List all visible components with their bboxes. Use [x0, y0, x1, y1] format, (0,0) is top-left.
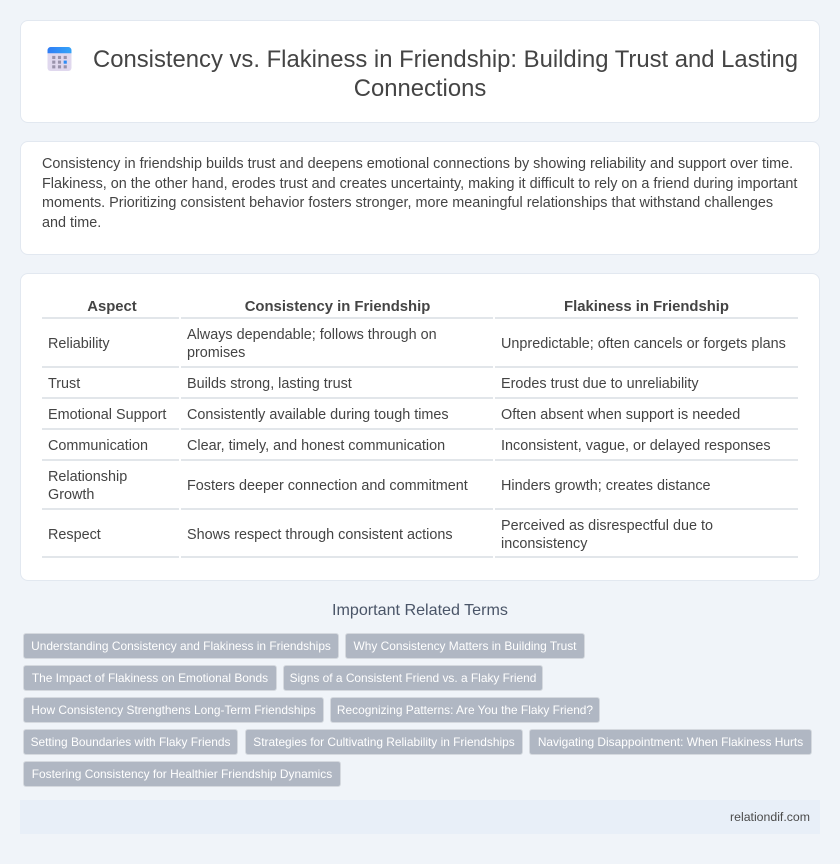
row: Communication: Inconsistent, vague, or delayed responses	[501, 438, 771, 454]
panel: introduction	[20, 141, 820, 255]
row: Trust	[48, 376, 699, 392]
footer source: relationdif.com	[730, 810, 810, 824]
footer	[20, 800, 820, 834]
tag	[245, 729, 523, 755]
table header: Aspect	[87, 299, 137, 315]
tag: Fostering Consistency for Healthier Friendship Dynamics	[32, 767, 332, 781]
tag: Signs of a Consistent Friend vs. a Flaky Friend	[290, 671, 536, 685]
table header: Flakiness in Friendship	[564, 299, 729, 315]
panel: title header	[20, 20, 820, 123]
intro text: Flakiness, on the other hand, erodes trust and creates uncertainty, making it difficult to rely on a friend during important	[42, 176, 797, 192]
tag	[23, 697, 324, 723]
intro text	[42, 156, 798, 230]
tag: Recognizing Patterns: Are You the Flaky Friend?	[337, 703, 593, 717]
panel: comparison table	[20, 273, 820, 581]
tag: Why Consistency Matters in Building Trust	[354, 639, 576, 653]
row: Relationship Growth: Fosters deeper connection and commitment	[187, 478, 468, 494]
row: Reliability: promises	[187, 345, 245, 361]
tag: How Consistency Strengthens Long-Term Friendships	[31, 703, 316, 717]
row: Emotional Support	[48, 407, 740, 423]
row: Reliability	[48, 327, 786, 361]
tag	[23, 665, 277, 691]
row: Reliability: Always dependable; follows through on	[187, 327, 437, 343]
tag	[283, 665, 543, 691]
comparison table	[42, 299, 798, 558]
row: Respect: inconsistency	[501, 536, 587, 552]
intro text: Consistency in friendship builds trust and deepens emotional connections by showing reliability and support over time.	[42, 156, 793, 172]
table header	[87, 299, 729, 315]
row: Trust: Builds strong, lasting trust	[187, 376, 352, 392]
heading: related terms: Important Related Terms	[332, 601, 508, 619]
row: Trust: Trust	[48, 376, 80, 392]
row: Reliability: Unpredictable; often cancels or forgets plans	[501, 336, 786, 352]
title: Consistency vs. Flakiness in Friendship: Building Trust and Lasting	[93, 46, 798, 72]
row: Relationship Growth: Growth	[48, 487, 94, 503]
intro text: and time.	[42, 214, 101, 230]
row: Communication: Communication	[48, 438, 148, 454]
tag: Navigating Disappointment: When Flakiness Hurts	[538, 735, 803, 749]
intro text: moments. Prioritizing consistent behavior fosters stronger, more meaningful relationships that withstand challenges	[42, 195, 773, 211]
row: Respect	[48, 518, 713, 552]
tag	[345, 633, 585, 659]
row: Communication	[48, 438, 771, 454]
row: Respect: Shows respect through consistent actions	[187, 527, 453, 543]
row: Emotional Support: Consistently available during tough times	[187, 407, 449, 423]
row: Relationship Growth: Hinders growth; creates distance	[501, 478, 711, 494]
row: Relationship Growth: Relationship	[48, 469, 127, 485]
tag: The Impact of Flakiness on Emotional Bonds	[32, 671, 268, 685]
tag	[23, 761, 341, 787]
title: Connections	[354, 75, 486, 102]
row: Reliability: Reliability	[48, 336, 110, 352]
tag: Strategies for Cultivating Reliability in Friendships	[253, 735, 515, 749]
row: Emotional Support: Often absent when support is needed	[501, 407, 740, 423]
tag	[23, 729, 238, 755]
row: Relationship Growth	[48, 469, 711, 503]
icon: calendar	[48, 47, 72, 71]
tag	[330, 697, 600, 723]
row: Trust: Erodes trust due to unreliability	[501, 376, 699, 392]
related term tags	[23, 633, 812, 787]
tag: Understanding Consistency and Flakiness in Friendships	[31, 639, 331, 653]
tag	[529, 729, 812, 755]
row: Respect: Perceived as disrespectful due to	[501, 518, 713, 534]
title	[93, 46, 798, 102]
row: Communication: Clear, timely, and honest communication	[187, 438, 445, 454]
tag: Setting Boundaries with Flaky Friends	[31, 735, 230, 749]
table header: Consistency in Friendship	[245, 299, 430, 315]
row: Respect: Respect	[48, 527, 101, 543]
tag	[23, 633, 339, 659]
row: Emotional Support: Emotional Support	[48, 407, 166, 423]
